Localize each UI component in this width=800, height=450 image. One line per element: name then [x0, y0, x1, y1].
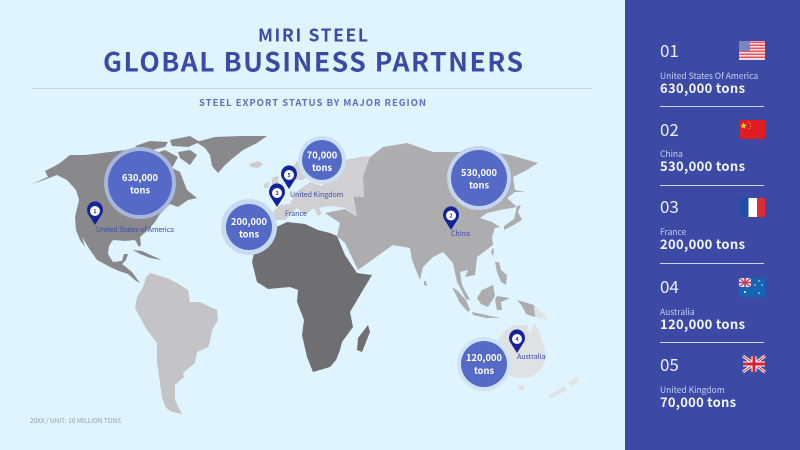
pin: Australia: 4 — [516, 336, 519, 343]
item 05: United Kingdom — [660, 384, 725, 396]
item 04: 120,000 tons — [660, 314, 745, 333]
label: Australia: Australia — [517, 352, 546, 362]
item 05: 05 — [660, 351, 679, 376]
bubble: France 200,000 tons: 200,000 — [231, 214, 267, 228]
item 05: 70,000 tons — [660, 392, 736, 411]
icon: USA flag — [739, 41, 765, 60]
icon: Australia flag — [739, 278, 765, 297]
bubble: Australia 120,000 tons — [457, 337, 511, 391]
pin: USA: 1 — [94, 208, 97, 215]
label: United States of America: United States of America — [96, 225, 174, 235]
world map — [32, 136, 578, 414]
bubble: France 200,000 tons: tons — [239, 226, 259, 240]
map: oceania — [497, 305, 578, 398]
bubble: USA 630,000 tons: tons — [130, 182, 150, 196]
pin: France — [269, 183, 285, 207]
pin: France: 3 — [276, 190, 279, 197]
map: africa — [252, 222, 372, 372]
item 04: Australia — [660, 306, 695, 318]
title: MIRI STEEL — [258, 22, 368, 48]
item 03 — [660, 193, 745, 253]
icon: France flag — [740, 198, 765, 217]
item 01: 630,000 tons — [660, 78, 745, 97]
bubble: China 530,000 tons: 530,000 — [461, 165, 497, 179]
pin: Australia — [509, 329, 525, 353]
map: asia — [325, 143, 538, 318]
bubble: China 530,000 tons: tons — [469, 178, 489, 192]
footnote: 20XX / UNIT: 10 MILLION TONS — [30, 415, 121, 425]
map: europe — [263, 145, 372, 236]
bubble: UK 70,000 tons: tons — [312, 160, 332, 174]
item 04: 04 — [660, 273, 679, 298]
item 03: France — [660, 226, 687, 238]
item 01 — [660, 37, 758, 97]
bubble: USA 630,000 tons: 630,000 — [122, 170, 158, 184]
map: iceland — [249, 161, 263, 168]
subtitle: STEEL EXPORT STATUS BY MAJOR REGION — [199, 95, 426, 109]
item 05 — [660, 351, 736, 411]
item 03: 200,000 tons — [660, 234, 745, 253]
panel: ranking sidebar — [625, 0, 800, 450]
icon: UK flag — [743, 356, 765, 372]
pin: USA — [87, 201, 103, 225]
item 02: China — [660, 148, 683, 160]
bubble: UK 70,000 tons: 70,000 — [307, 148, 338, 162]
pin: China — [443, 206, 459, 230]
item 04 — [660, 273, 745, 333]
map: greenland — [196, 136, 267, 173]
item 03: 03 — [660, 193, 679, 218]
bubble: China 530,000 tons — [447, 146, 511, 210]
label: France: France — [285, 209, 307, 219]
item 02 — [660, 116, 745, 175]
label: United Kingdom: United Kingdom — [290, 190, 343, 200]
bubble: UK 70,000 tons — [298, 136, 346, 184]
title: GLOBAL BUSINESS PARTNERS — [103, 40, 523, 80]
item 01: 01 — [660, 37, 679, 62]
bubble: France 200,000 tons — [221, 199, 277, 255]
bubble: USA 630,000 tons — [104, 147, 176, 219]
title — [103, 22, 523, 80]
item 02: 530,000 tons — [660, 156, 745, 175]
label: China: China — [451, 229, 470, 239]
map: south america — [135, 273, 218, 414]
pin: UK — [281, 165, 297, 189]
map: north america — [32, 136, 200, 283]
icon: China flag — [740, 120, 765, 139]
item 01: United States Of America — [660, 70, 758, 82]
item 02: 02 — [660, 116, 679, 141]
pin: UK: 5 — [288, 172, 291, 179]
bubble: Australia 120,000 tons: tons — [474, 363, 494, 377]
bubble: Australia 120,000 tons: 120,000 — [466, 350, 502, 364]
pin: China: 2 — [450, 212, 453, 220]
